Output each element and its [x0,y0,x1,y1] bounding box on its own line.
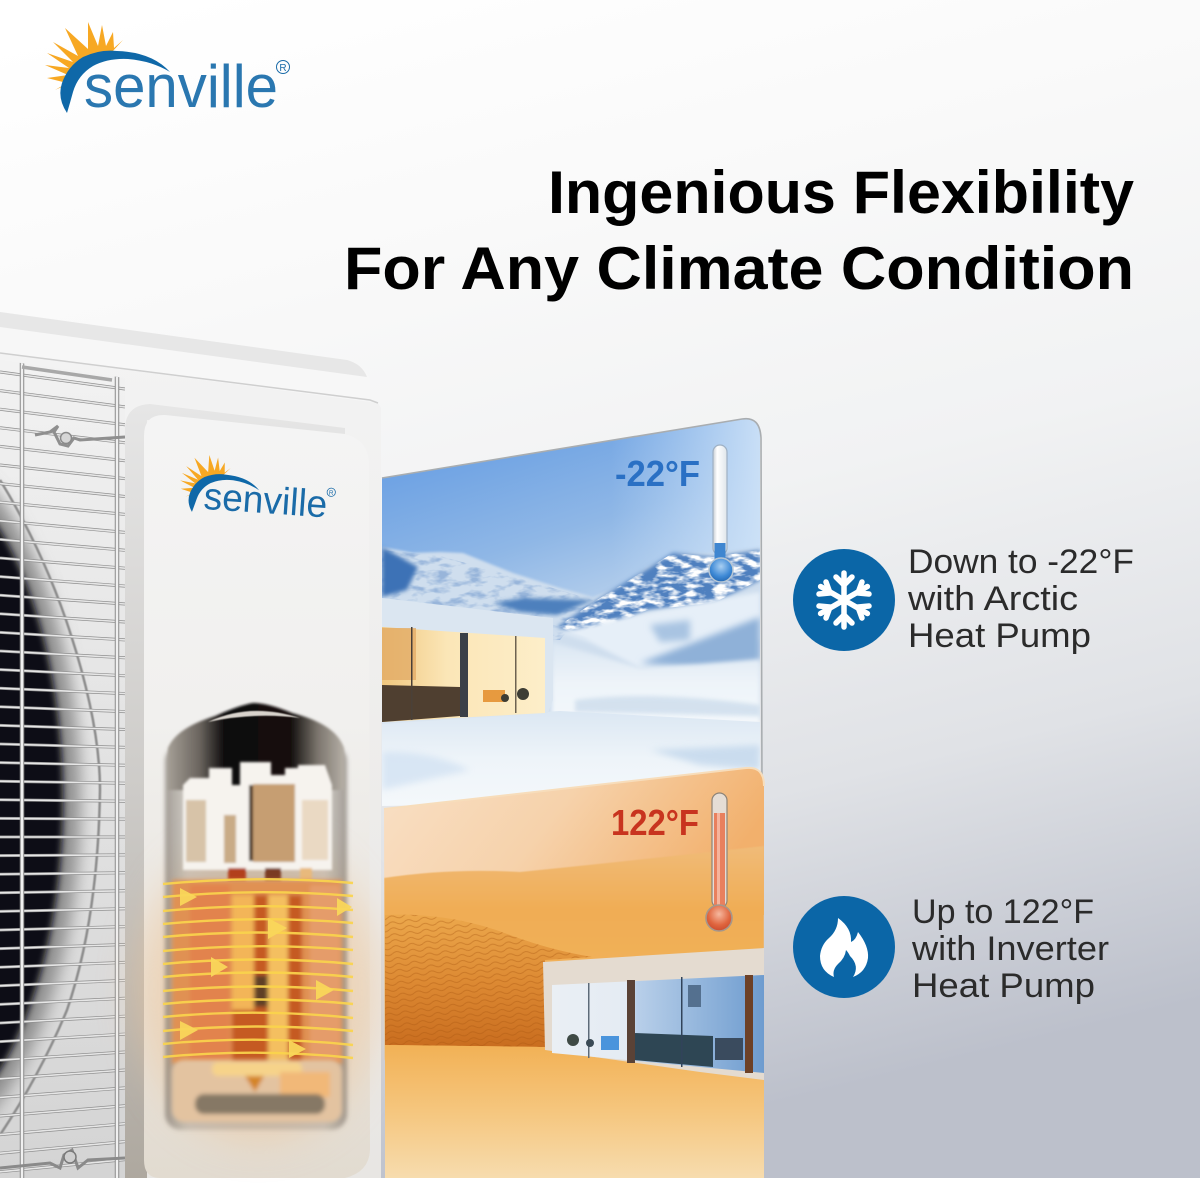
hot section [172,880,342,1065]
coil lines [163,879,353,1058]
text: arctic heat pump: with Arctic [907,580,1078,618]
panel: hot climate scene [380,765,770,1178]
cold panel frame highlight [382,419,762,795]
icon: snowflake badge [793,549,895,651]
logo: senville top left [45,22,290,120]
title [344,159,1135,302]
front panel [144,415,370,1178]
text: arctic heat pump: Down to -22°F [908,543,1134,581]
text: inverter heat pump: Up to 122°F [912,893,1094,931]
icon: hot thermometer [706,793,732,931]
hot panel frame highlight [384,768,764,809]
logo: senville top left: R [279,63,287,74]
snowy mountains [382,547,760,725]
small logo on panel: senville [202,475,329,526]
title: Ingenious Flexibility [548,159,1135,226]
fan grille [0,360,125,1180]
icon: flame badge [793,896,895,998]
stator [183,762,332,881]
house in desert [543,948,764,1080]
coil flow arrows [180,888,352,1058]
unit body [0,353,381,1178]
feature: inverter heat pump [793,893,1109,1005]
text: arctic heat pump [907,543,1134,655]
outdoor heat pump unit [0,312,381,1180]
compressor cutaway [138,703,378,1140]
small logo on panel: R [329,490,334,497]
text: arctic heat pump: Heat Pump [908,617,1091,655]
title: For Any Climate Condition [344,235,1134,302]
small logo on panel [178,453,337,527]
icon: cold thermometer [709,445,733,582]
logo: senville top left: senville [84,53,278,120]
text: inverter heat pump [911,893,1109,1005]
text: inverter heat pump: Heat Pump [912,967,1095,1005]
text: inverter heat pump: with Inverter [911,930,1109,968]
lower housing [172,1060,342,1122]
desert dunes [384,846,764,1060]
panel: cold climate scene [380,415,765,806]
panel rim [125,404,345,1178]
cold temperature label: -22°F [615,453,700,494]
house in snow [382,598,553,724]
feature: arctic heat pump [793,543,1134,655]
snow ground [382,711,760,806]
unit top cap [0,312,370,400]
hot temperature label: 122°F [611,802,699,843]
